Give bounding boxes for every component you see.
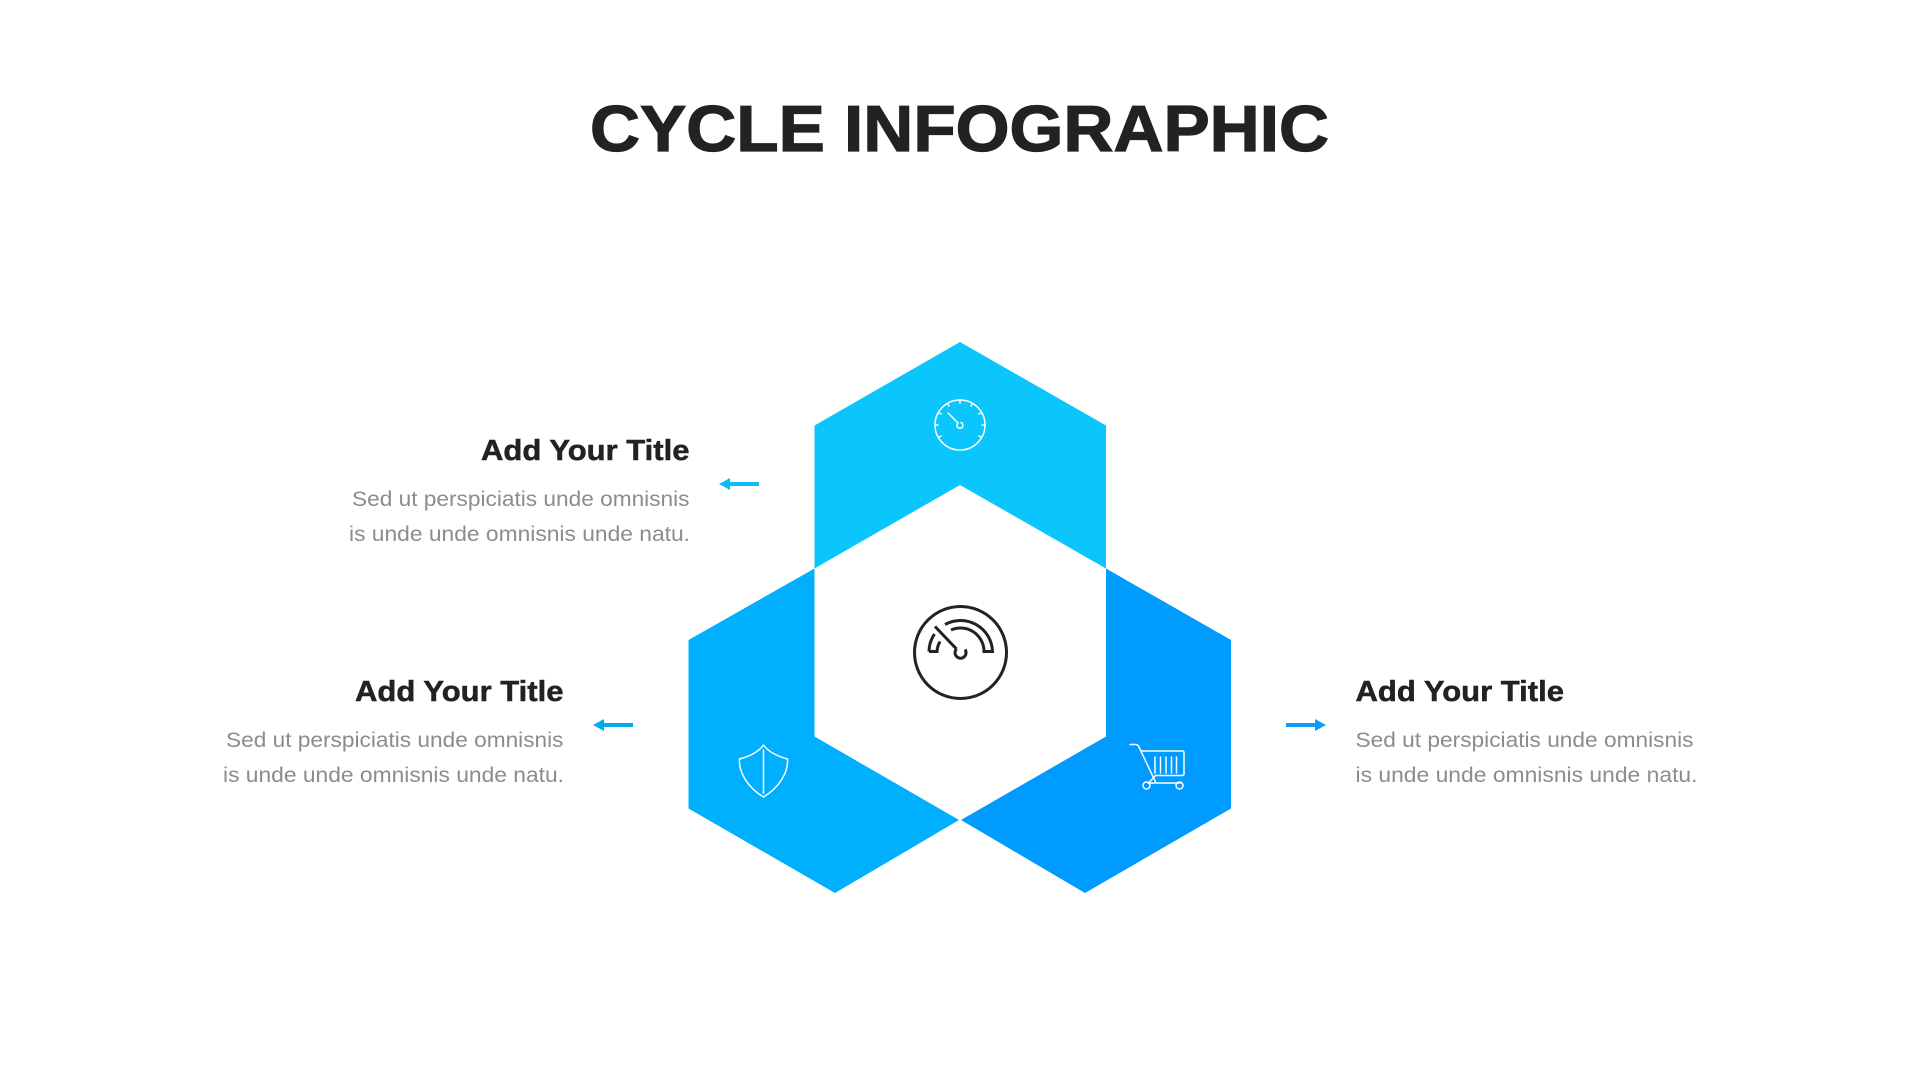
heading: Add Your Title <box>355 676 564 708</box>
text block: top item <box>349 435 690 546</box>
title: CYCLE INFOGRAPHIC <box>590 92 1329 165</box>
body text: is unde unde omnisnis unde natu. <box>1356 764 1698 787</box>
icon: shopping cart <box>1130 744 1184 789</box>
heading: Add Your Title <box>1356 676 1564 708</box>
body text: Sed ut perspiciatis unde omnisnis <box>352 488 690 511</box>
cycle diagram <box>688 342 1231 893</box>
text block: left item <box>223 676 564 787</box>
heading: Add Your Title <box>481 435 690 467</box>
text block: right item <box>1356 676 1698 787</box>
body text: is unde unde omnisnis unde natu. <box>349 523 690 546</box>
body text: is unde unde omnisnis unde natu. <box>223 764 564 787</box>
body text <box>349 488 690 546</box>
icon: center dashboard gauge <box>914 606 1006 698</box>
hexagon segment: left <box>688 568 959 893</box>
icon: top stopwatch gauge <box>935 400 985 450</box>
hexagon segment: top <box>814 342 1106 568</box>
icon: shield <box>739 745 788 797</box>
hexagon segment: right <box>961 568 1231 893</box>
body text: Sed ut perspiciatis unde omnisnis <box>226 729 564 752</box>
arrow: right item <box>1286 719 1326 731</box>
arrow: top item <box>719 478 759 490</box>
body text <box>223 729 564 787</box>
body text <box>1356 729 1698 787</box>
body text: Sed ut perspiciatis unde omnisnis <box>1356 729 1694 752</box>
arrow: left item <box>593 719 633 731</box>
